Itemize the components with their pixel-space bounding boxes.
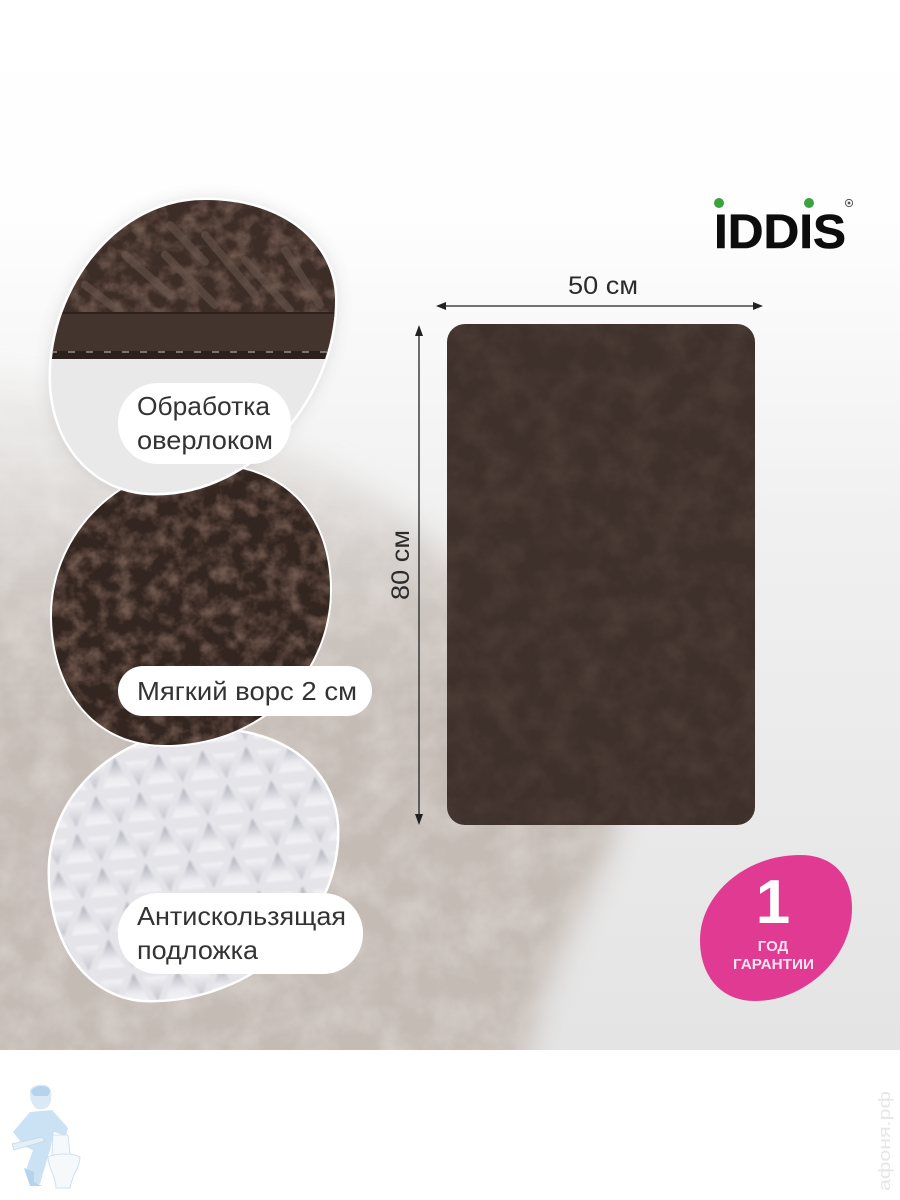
- overlock photo: [40, 195, 340, 499]
- shadow behind overlock circle: [51, 200, 335, 493]
- logo: IDDIS: IDDIS: [714, 206, 846, 259]
- icon: plumber mascot: [12, 1085, 80, 1188]
- dimension: height 80 cm: [387, 325, 423, 825]
- bath mat: [447, 324, 755, 825]
- panel: overlock edging: [40, 195, 340, 499]
- label: soft pile: Мягкий ворс 2 см: [137, 676, 357, 706]
- label: anti-slip: подложка: [137, 935, 259, 965]
- carpet background photo: [0, 360, 615, 1090]
- warranty badge: 1: [756, 868, 790, 937]
- label: anti-slip: [118, 893, 363, 974]
- warranty badge: ГОД: [758, 938, 789, 955]
- label: overlock: [118, 383, 291, 464]
- label: anti-slip: Антискользящая: [137, 901, 346, 931]
- label: soft pile: [118, 666, 372, 716]
- label: overlock: Обработка: [137, 391, 271, 421]
- dimension: width 50 cm: [436, 272, 763, 310]
- logo dot left: [714, 198, 724, 208]
- warranty badge: [700, 855, 852, 1001]
- dimension: height 80 cm: 80 см: [387, 530, 415, 600]
- panel: anti-slip backing: [45, 725, 345, 1005]
- logo dot right: [804, 198, 814, 208]
- registered mark: [845, 199, 853, 207]
- watermark: афоня.рф: [875, 1091, 894, 1191]
- label: overlock: оверлоком: [137, 425, 273, 455]
- panel: soft pile: [50, 460, 335, 750]
- anti-slip texture: [45, 725, 345, 1005]
- background bottom edge: [0, 1050, 900, 1200]
- soft pile photo: [50, 460, 335, 750]
- dimension: width 50 cm: 50 см: [568, 272, 638, 300]
- warranty badge: ГАРАНТИИ: [733, 956, 814, 973]
